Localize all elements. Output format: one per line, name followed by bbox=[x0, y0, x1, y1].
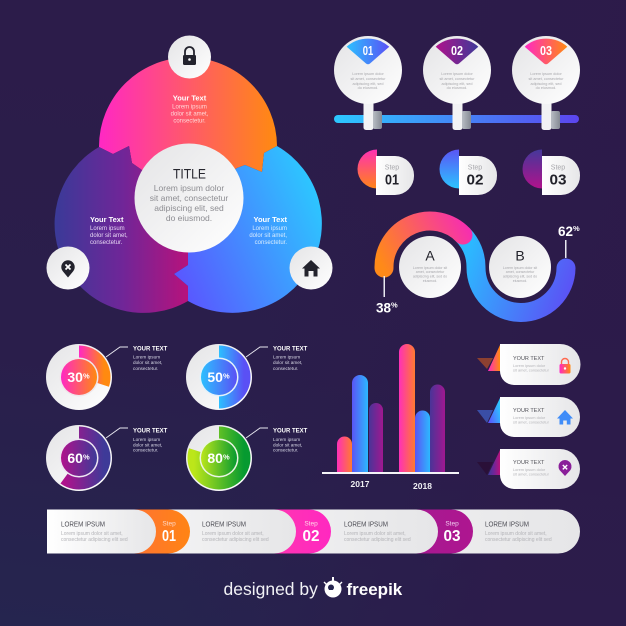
step tab 02 bbox=[440, 150, 497, 195]
pin 01: sit amet, consectetur bbox=[350, 77, 386, 81]
banner text 1: consectetur adipiscing elit sed bbox=[61, 537, 128, 543]
step label 03: Step bbox=[445, 520, 459, 528]
circle A: A bbox=[425, 248, 435, 264]
text: top segment bbox=[171, 94, 209, 124]
banner text 2: consectetur adipiscing elit sed bbox=[202, 537, 269, 543]
bars 2018 bbox=[399, 344, 445, 472]
pin 02: sit amet, consectetur bbox=[439, 77, 475, 81]
donut 30% bbox=[46, 344, 112, 410]
pin 03: adipiscing elit, sed bbox=[530, 82, 562, 86]
caption 50%: YOUR TEXT bbox=[273, 346, 308, 352]
banner segment 4 bbox=[47, 510, 580, 554]
center title circle: Lorem ipsum dolor bbox=[154, 183, 224, 193]
ribbon card x marker bbox=[477, 449, 580, 489]
text: right segment: Lorem ipsum bbox=[252, 226, 287, 232]
step label 02: Step bbox=[304, 520, 318, 528]
banner text 4 bbox=[485, 520, 552, 543]
icon: lock bbox=[168, 36, 211, 78]
circle B: eiusmod. bbox=[513, 279, 527, 283]
center title circle: sit amet, consectetur bbox=[150, 193, 228, 203]
caption 80% bbox=[246, 428, 308, 453]
banner text 1: LOREM IPSUM bbox=[61, 520, 105, 528]
pin 01: Lorem ipsum dolor bbox=[352, 72, 384, 76]
donut 80%: 80 bbox=[207, 450, 223, 466]
step tab 03: Step bbox=[551, 164, 565, 172]
pin 03: do eiusmod. bbox=[536, 86, 556, 90]
caption 80%: consectetur. bbox=[273, 448, 298, 453]
caption 60% bbox=[106, 428, 168, 453]
center title circle bbox=[134, 144, 244, 252]
banner text 2: Lorem ipsum dolor sit amet, bbox=[202, 531, 264, 537]
step tab 01: 01 bbox=[385, 172, 399, 188]
banner color step 02 bbox=[47, 510, 331, 554]
segment: left purple bbox=[55, 146, 189, 313]
banner segment 1 bbox=[47, 510, 156, 554]
ribbon cards bbox=[477, 344, 580, 489]
pin 03: Lorem ipsum dolor bbox=[530, 72, 562, 76]
ribbon card lock: YOUR TEXT bbox=[513, 356, 545, 362]
banner text 3: Lorem ipsum dolor sit amet, bbox=[344, 531, 406, 537]
caption 60%: consectetur. bbox=[133, 448, 158, 453]
bars 2017 bbox=[337, 375, 383, 472]
donut 60% bbox=[46, 425, 112, 491]
banner color step 01 bbox=[47, 510, 190, 554]
caption 30%: dolor sit amet, bbox=[133, 360, 162, 365]
step label 01: 01 bbox=[162, 528, 176, 545]
label 62%: 62 bbox=[558, 224, 573, 239]
step label 01 bbox=[162, 520, 176, 545]
wave blue segment bbox=[463, 235, 566, 313]
circle A: eiusmod. bbox=[423, 279, 437, 283]
label 2017: 2017 bbox=[351, 479, 370, 489]
caption 50% bbox=[246, 346, 308, 371]
timeline bar bbox=[334, 115, 579, 123]
pin 02: do eiusmod. bbox=[447, 86, 467, 90]
step tab 01: Step bbox=[385, 164, 399, 172]
icon: home bbox=[290, 246, 332, 290]
center title circle: adipiscing elit, sed bbox=[154, 203, 224, 213]
banner text 3 bbox=[344, 520, 411, 543]
banner text 4: LOREM IPSUM bbox=[485, 520, 529, 528]
ribbon card x marker: YOUR TEXT bbox=[513, 460, 545, 466]
step tab 03 bbox=[522, 150, 580, 195]
banner text 2: LOREM IPSUM bbox=[202, 520, 246, 528]
donut 50%: 50 bbox=[207, 369, 223, 385]
donut charts bbox=[46, 344, 308, 491]
pin 03 bbox=[512, 36, 580, 130]
pin 03: 03 bbox=[540, 44, 552, 58]
text: right segment: dolor sit amet, bbox=[249, 233, 287, 239]
center title circle: TITLE bbox=[173, 166, 206, 182]
circle B: Lorem ipsum dolor sit bbox=[503, 266, 537, 270]
ribbon card x marker: Lorem ipsum dolor bbox=[513, 467, 546, 472]
pin 01: do eiusmod. bbox=[358, 86, 378, 90]
banner color step 03 bbox=[47, 510, 473, 554]
circle A: adipiscing elit, sed do bbox=[413, 274, 447, 278]
ribbon card x marker: sit amet, consectetur bbox=[513, 472, 550, 476]
circle B: B bbox=[515, 248, 525, 264]
label 38%: % bbox=[391, 300, 398, 309]
caption 60%: YOUR TEXT bbox=[133, 428, 168, 434]
donut 60%: % bbox=[83, 452, 90, 462]
banner text 1 bbox=[61, 520, 128, 543]
caption 60%: dolor sit amet, bbox=[133, 442, 162, 447]
circle B: amet, consectetur bbox=[506, 270, 535, 274]
step label 03 bbox=[444, 520, 461, 545]
caption 50%: dolor sit amet, bbox=[273, 360, 302, 365]
caption 30% bbox=[106, 346, 168, 371]
text: right segment: Your Text bbox=[254, 215, 287, 224]
label 62%: % bbox=[573, 224, 580, 233]
step label 02 bbox=[302, 520, 320, 545]
text: left segment bbox=[90, 215, 128, 246]
donut 60%: 60 bbox=[67, 450, 83, 466]
circle A: amet, consectetur bbox=[416, 270, 445, 274]
label 38%: 38 bbox=[376, 300, 391, 315]
circle B bbox=[489, 236, 551, 298]
step tab 02: Step bbox=[468, 164, 482, 172]
timeline pins bbox=[334, 36, 580, 130]
footer credit: freepik bbox=[346, 580, 403, 599]
wave orange segment bbox=[384, 221, 463, 268]
step label 01: Step bbox=[162, 520, 176, 528]
segment: right blue bbox=[174, 146, 322, 313]
label 62% bbox=[558, 224, 580, 258]
caption 30%: Lorem ipsum bbox=[133, 354, 160, 360]
donut 80% bbox=[186, 425, 252, 491]
pin 02: Lorem ipsum dolor bbox=[441, 72, 473, 76]
text: left segment: dolor sit amet, bbox=[90, 233, 128, 239]
circle B: adipiscing elit, sed do bbox=[503, 274, 537, 278]
axis line bbox=[322, 472, 459, 474]
pin 03: sit amet, consectetur bbox=[528, 77, 564, 81]
label 38% bbox=[376, 276, 398, 315]
pin 02: 02 bbox=[451, 44, 463, 58]
step tab 01 bbox=[358, 150, 414, 195]
text: top segment: Lorem ipsum bbox=[172, 104, 207, 110]
ribbon card home: YOUR TEXT bbox=[513, 408, 545, 414]
step tab 02: 02 bbox=[466, 172, 484, 188]
pin 02: adipiscing elit, sed bbox=[441, 82, 473, 86]
text: left segment: Lorem ipsum bbox=[90, 226, 125, 232]
pin 01 bbox=[334, 36, 402, 130]
banner text 3: LOREM IPSUM bbox=[344, 520, 388, 528]
pin 01: adipiscing elit, sed bbox=[352, 82, 384, 86]
ribbon card home: Lorem ipsum dolor bbox=[513, 415, 546, 420]
text: top segment: consectetur. bbox=[173, 118, 206, 124]
ribbon card lock: Lorem ipsum dolor bbox=[513, 363, 546, 368]
circle A: Lorem ipsum dolor sit bbox=[413, 266, 447, 270]
label 2018: 2018 bbox=[413, 481, 432, 491]
text: right segment bbox=[249, 215, 287, 246]
caption 80%: Lorem ipsum bbox=[273, 437, 300, 442]
step banner bbox=[47, 510, 580, 554]
pin 02 bbox=[423, 36, 491, 130]
banner segment 2 bbox=[47, 510, 296, 554]
bar chart bbox=[322, 344, 459, 491]
step tabs bbox=[358, 150, 580, 195]
wave chart bbox=[376, 221, 580, 315]
step label 03: 03 bbox=[444, 528, 461, 545]
ribbon card home bbox=[477, 397, 580, 437]
donut 80%: % bbox=[223, 452, 230, 462]
banner text 4: Lorem ipsum dolor sit amet, bbox=[485, 531, 547, 537]
segment: top pink orange bbox=[99, 57, 277, 198]
icon: x marker bbox=[46, 246, 90, 290]
banner segment 3 bbox=[47, 510, 438, 554]
text: top segment: Your Text bbox=[173, 94, 207, 102]
banner text 3: consectetur adipiscing elit sed bbox=[344, 537, 411, 543]
caption 80%: dolor sit amet, bbox=[273, 442, 302, 447]
step label 02: 02 bbox=[302, 528, 320, 545]
text: left segment: consectetur. bbox=[90, 240, 123, 246]
donut 30%: 30 bbox=[67, 369, 83, 385]
banner text 2 bbox=[202, 520, 269, 543]
caption 50%: Lorem ipsum bbox=[273, 354, 300, 360]
text: left segment: Your Text bbox=[90, 215, 124, 224]
cycle diagram bbox=[46, 36, 332, 313]
caption 30%: YOUR TEXT bbox=[133, 346, 168, 352]
footer credit: designed by bbox=[224, 579, 318, 599]
donut 50%: % bbox=[223, 372, 230, 380]
footer credit bbox=[224, 577, 403, 599]
caption 50%: consectetur. bbox=[273, 366, 298, 371]
icon: freepik mascot bbox=[324, 577, 342, 598]
circle A bbox=[399, 236, 461, 298]
text: right segment: consectetur. bbox=[255, 240, 287, 246]
pin 01: 01 bbox=[363, 44, 373, 58]
text: top segment: dolor sit amet, bbox=[171, 112, 209, 118]
donut 50% bbox=[186, 344, 252, 410]
caption 80%: YOUR TEXT bbox=[273, 428, 308, 434]
ribbon card lock: sit amet, consectetur bbox=[513, 368, 550, 372]
caption 60%: Lorem ipsum bbox=[133, 437, 160, 442]
donut 30%: % bbox=[83, 372, 90, 380]
banner text 4: consectetur adipiscing elit sed bbox=[485, 537, 552, 543]
ribbon card lock bbox=[477, 344, 580, 385]
caption 30%: consectetur. bbox=[133, 366, 158, 371]
banner text 1: Lorem ipsum dolor sit amet, bbox=[61, 531, 123, 537]
step tab 03: 03 bbox=[550, 172, 566, 188]
ribbon card home: sit amet, consectetur bbox=[513, 420, 550, 424]
center title circle: do eiusmod. bbox=[166, 213, 212, 223]
